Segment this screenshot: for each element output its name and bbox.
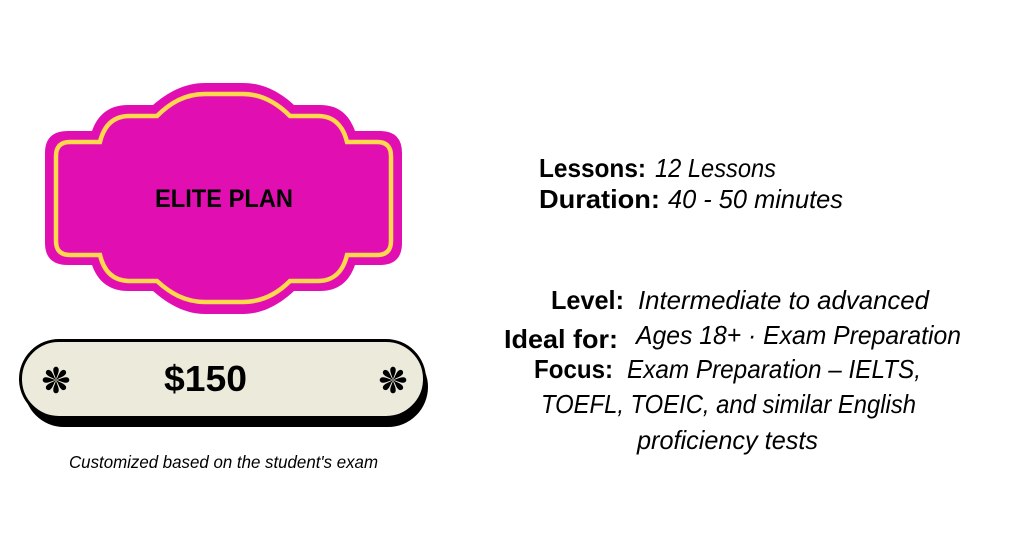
text block: level, ideal for and focus: proficiency tests — [636, 425, 818, 455]
text block: lessons and duration — [539, 153, 843, 214]
text block: level, ideal for and focus: Level: — [551, 285, 624, 315]
text block: level, ideal for and focus: Ideal for: — [504, 324, 618, 354]
price note: Customized based on the student's exam — [69, 452, 378, 472]
badge title: ELITE PLAN — [155, 185, 293, 213]
pill body — [20, 340, 424, 418]
text block: level, ideal for and focus: Ages 18+ · Exam Preparation — [634, 320, 961, 350]
pill shadow — [24, 347, 428, 427]
panel: plan badge — [45, 83, 402, 314]
text block: lessons and duration: 40 - 50 minutes — [668, 184, 843, 214]
text block: level, ideal for and focus: Focus: — [534, 354, 613, 384]
icon: left flower — [43, 367, 69, 393]
text block: level, ideal for and focus: TOEFL, TOEIC, and similar English — [541, 389, 916, 419]
text block: lessons and duration: 12 Lessons — [655, 153, 776, 183]
badge shape — [45, 83, 402, 314]
text block: lessons and duration: Lessons: — [539, 153, 646, 183]
icon: right flower — [380, 367, 406, 393]
text block: level, ideal for and focus: Intermediate to advanced — [638, 285, 931, 315]
badge yellow outline — [56, 94, 391, 302]
text block: lessons and duration: Duration: — [539, 184, 660, 214]
text block: level, ideal for and focus: Exam Preparation – IELTS, — [627, 354, 921, 384]
panel: price pill — [20, 340, 428, 427]
price: $150 — [164, 358, 247, 399]
text block: level, ideal for and focus — [504, 285, 961, 455]
